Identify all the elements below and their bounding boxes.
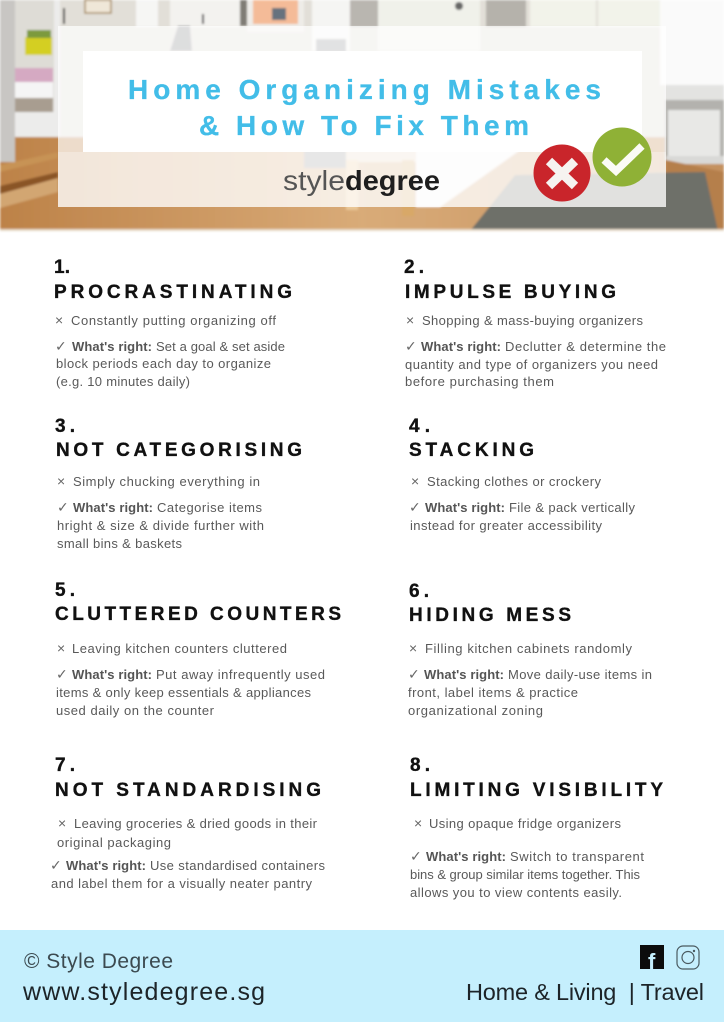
white title panel xyxy=(83,51,642,152)
panel: mistake 6: Move daily-use items in xyxy=(508,667,652,682)
heading: limiting visibility: LIMITING VISIBILITY xyxy=(410,780,663,801)
title: & How To Fix Them xyxy=(199,110,529,141)
panel: mistake 8: Switch to transparent xyxy=(510,849,644,864)
panel: mistake 1: Set a goal & set aside xyxy=(156,339,285,354)
panel: mistake 8: ✓ xyxy=(410,848,422,864)
panel: mistake 6: 6. xyxy=(409,581,429,602)
panel: mistake 8: Using opaque fridge organizers xyxy=(429,816,622,831)
heading: hiding mess: HIDING MESS xyxy=(409,605,571,626)
panel: mistake 2: Shopping & mass-buying organizers xyxy=(422,313,644,328)
panel: mistake 5: ✓ xyxy=(56,666,68,682)
panel: mistake 6: × xyxy=(409,640,417,656)
panel: mistake 7: original packaging xyxy=(57,835,171,850)
panel: mistake 8: × xyxy=(414,815,422,831)
panel: mistake 8: bins & group similar items together. This xyxy=(410,867,640,882)
website: www.styledegree.sg xyxy=(22,978,265,1006)
icon: green check xyxy=(592,128,652,186)
panel: mistake 2: What's right: xyxy=(421,339,501,354)
title: Home Organizing Mistakes xyxy=(128,74,601,105)
panel: mistake 2: before purchasing them xyxy=(405,374,554,389)
heading: not standardising: NOT STANDARDISING xyxy=(55,780,321,801)
panel: mistake 3 xyxy=(55,416,302,551)
icon: instagram xyxy=(677,946,699,969)
header photo: living room xyxy=(0,0,724,231)
translucent header panel xyxy=(58,26,666,207)
panel: mistake 7: Leaving groceries & dried goods in their xyxy=(74,816,318,831)
panel: mistake 1: What's right: xyxy=(72,339,152,354)
panel: mistake 5: items & only keep essentials & appliances xyxy=(56,685,312,700)
panel: mistake 1: 1. xyxy=(54,257,70,278)
copyright: © Style Degree xyxy=(24,950,173,973)
panel: mistake 2: 2. xyxy=(404,257,424,278)
heading: procrastinating: PROCRASTINATING xyxy=(54,282,292,303)
panel: mistake 2 xyxy=(404,257,666,389)
panel: mistake 4: 4. xyxy=(409,416,430,437)
panel: mistake 2: quantity and type of organizers you need xyxy=(405,357,658,372)
panel: mistake 7: × xyxy=(58,815,66,831)
panel: mistake 4: × xyxy=(411,473,419,489)
footer band xyxy=(0,930,724,1022)
panel: mistake 1: Constantly putting organizing off xyxy=(71,313,276,328)
panel: mistake 8: allows you to view contents easily. xyxy=(410,885,622,900)
panel: mistake 6: ✓ xyxy=(408,666,420,682)
panel: mistake 5: Leaving kitchen counters cluttered xyxy=(72,641,287,656)
panel: mistake 6: front, label items & practice xyxy=(408,685,578,700)
panel: mistake 6: organizational zoning xyxy=(408,703,543,718)
panel: mistake 8: 8. xyxy=(410,755,430,776)
panel: mistake 7 xyxy=(50,755,326,891)
panel: mistake 4: File & pack vertically xyxy=(509,500,636,515)
icon: facebook xyxy=(640,945,664,974)
panel: mistake 1: × xyxy=(55,312,63,328)
categories: Home & Living | Travel xyxy=(466,979,704,1005)
icon: facebook: f xyxy=(648,949,656,974)
panel: mistake 3: small bins & baskets xyxy=(57,536,182,551)
panel: mistake 6: What's right: xyxy=(424,667,504,682)
panel: mistake 7: Use standardised containers xyxy=(150,858,326,873)
panel: mistake 3: Simply chucking everything in xyxy=(73,474,260,489)
panel: mistake 5: Put away infrequently used xyxy=(156,667,325,682)
panel: mistake 7: 7. xyxy=(55,755,75,776)
panel: mistake 2: Declutter & determine the xyxy=(505,339,666,354)
panel: mistake 7: What's right: xyxy=(66,858,146,873)
panel: mistake 3: 3. xyxy=(55,416,75,437)
panel: mistake 4: instead for greater accessibility xyxy=(410,518,602,533)
panel: mistake 3: What's right: xyxy=(73,500,153,515)
panel: mistake 4: ✓ xyxy=(409,499,421,515)
panel: mistake 3: Categorise items xyxy=(157,500,262,515)
title xyxy=(128,74,601,141)
heading: impulse buying: IMPULSE BUYING xyxy=(405,282,616,303)
heading: cluttered counters: CLUTTERED COUNTERS xyxy=(55,604,341,625)
panel: mistake 7: ✓ xyxy=(50,857,62,873)
logo: style degree: style xyxy=(283,165,345,196)
panel: mistake 4: What's right: xyxy=(425,500,505,515)
panel: mistake 2: × xyxy=(406,312,414,328)
panel: mistake 1: ✓ xyxy=(55,338,67,354)
panel: mistake 4: Stacking clothes or crockery xyxy=(427,474,602,489)
logo: style degree xyxy=(283,165,440,196)
heading: not categorising: NOT CATEGORISING xyxy=(56,440,302,461)
icon: red cross xyxy=(534,144,590,202)
panel: mistake 7: and label them for a visually neater pantry xyxy=(51,876,312,891)
panel: mistake 6: Filling kitchen cabinets randomly xyxy=(425,641,632,656)
panel: mistake 3: hright & size & divide further with xyxy=(57,518,264,533)
panel: mistake 2: ✓ xyxy=(405,338,417,354)
panel: mistake 5: What's right: xyxy=(72,667,152,682)
panel: mistake 6 xyxy=(408,581,652,718)
panel: mistake 8 xyxy=(410,755,663,900)
panel: mistake 1: (e.g. 10 minutes daily) xyxy=(56,374,190,389)
panel: mistake 5: 5. xyxy=(55,580,75,601)
panel: mistake 1 xyxy=(54,257,292,389)
panel: mistake 5: used daily on the counter xyxy=(56,703,215,718)
panel: mistake 4 xyxy=(409,416,636,533)
heading: stacking: STACKING xyxy=(409,440,534,461)
panel: mistake 8: What's right: xyxy=(426,849,506,864)
logo: style degree: degree xyxy=(345,165,440,196)
panel: mistake 5 xyxy=(55,580,341,718)
panel: mistake 3: ✓ xyxy=(57,499,69,515)
panel: mistake 5: × xyxy=(57,640,65,656)
panel: mistake 1: block periods each day to organize xyxy=(56,356,271,371)
panel: mistake 3: × xyxy=(57,473,65,489)
